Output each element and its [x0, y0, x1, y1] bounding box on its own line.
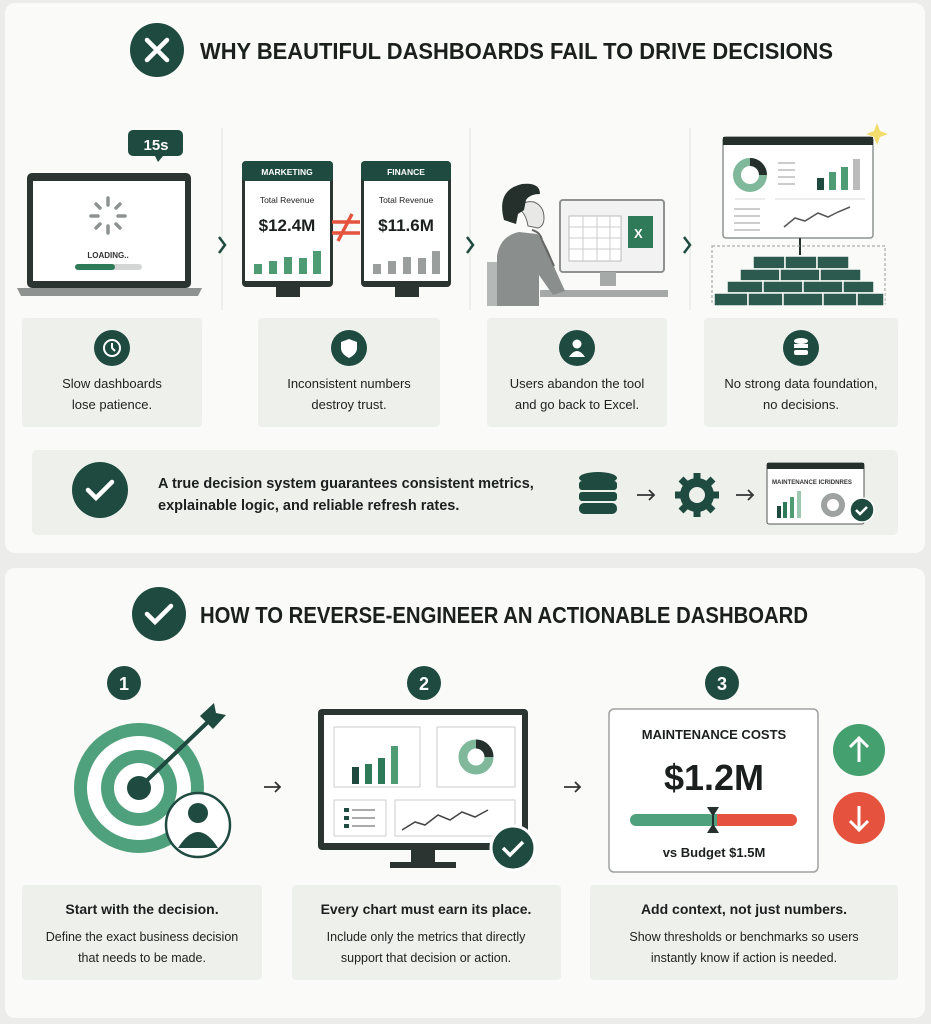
card: slow dashboards: lose patience. [72, 397, 152, 412]
icon: down arrow [833, 792, 885, 844]
panel: why dashboards fail [5, 3, 925, 553]
illustration: conflicting monitors: FINANCE [387, 167, 425, 177]
panel: how to reverse-engineer [5, 568, 925, 1018]
illustration: conflicting monitors: Total Revenue [260, 195, 314, 205]
illustration: KPI card with thresholds [609, 709, 818, 872]
card: every chart earns its place: Every chart must earn its place. [321, 901, 531, 917]
card: inconsistent numbers: destroy trust. [311, 397, 387, 412]
step 3 number: 3 [717, 674, 727, 694]
title 1 [130, 23, 833, 77]
card: every chart earns its place [292, 885, 561, 980]
title 2: HOW TO REVERSE-ENGINEER AN ACTIONABLE DASHBOARD [200, 602, 808, 628]
card: users abandon: and go back to Excel. [515, 397, 639, 412]
card: start with the decision: Define the exact business decision [46, 930, 238, 944]
illustration: conflicting monitors: $11.6M [378, 216, 434, 235]
step 1 number: 1 [119, 674, 129, 694]
icon: gear [675, 473, 719, 517]
card: every chart earns its place: support that decision or action. [341, 951, 511, 965]
card: inconsistent numbers [258, 318, 440, 427]
card: inconsistent numbers: Inconsistent numbers [287, 376, 411, 391]
illustration: KPI card with thresholds: MAINTENANCE COSTS [642, 727, 787, 742]
card: add context [590, 885, 898, 980]
card: users abandon: Users abandon the tool [510, 376, 644, 391]
card: add context: instantly know if action is needed. [651, 951, 837, 965]
illustration: user back to excel: X [634, 226, 643, 241]
title 2 [132, 587, 808, 641]
step 2 number [407, 666, 441, 700]
step 1 number [107, 666, 141, 700]
step 2 number: 2 [419, 674, 429, 694]
illustration: conflicting monitors [242, 161, 451, 297]
arrow [564, 782, 580, 792]
icon: mini dashboard [767, 463, 874, 524]
illustration: conflicting monitors: MARKETING [261, 167, 313, 177]
card: start with the decision [22, 885, 262, 980]
card: start with the decision: that needs to be made. [78, 951, 206, 965]
banner: true decision system [32, 450, 898, 535]
step 3 number [705, 666, 739, 700]
illustration: conflicting monitors: $12.4M [259, 216, 315, 235]
illustration: slow laptop: 15s [143, 137, 169, 154]
illustration: KPI card with thresholds: vs Budget $1.5M [663, 845, 765, 860]
icon: database [579, 472, 617, 514]
icon: mini dashboard: MAINTENANCE ICRIDNRES [772, 480, 852, 486]
title 1: WHY BEAUTIFUL DASHBOARDS FAIL TO DRIVE DECISIONS [200, 38, 833, 64]
icon: up arrow [833, 724, 885, 776]
card: no data foundation: no decisions. [763, 397, 839, 412]
card: users abandon [487, 318, 667, 427]
banner: true decision system: explainable logic, and reliable refresh rates. [158, 498, 459, 514]
illustration: target with person [74, 703, 230, 857]
card: no data foundation: No strong data foundation, [724, 376, 878, 391]
banner: true decision system: A true decision system guarantees consistent metrics, [158, 476, 534, 492]
illustration: user back to excel [487, 184, 668, 306]
illustration: data foundation [712, 123, 888, 306]
card: slow dashboards: Slow dashboards [62, 376, 162, 391]
card: start with the decision: Start with the decision. [65, 901, 219, 917]
illustration: slow laptop: LOADING.. [87, 251, 129, 260]
arrow [467, 237, 473, 253]
illustration: slow laptop [17, 130, 202, 296]
arrow [684, 237, 690, 253]
card: no data foundation [704, 318, 898, 427]
illustration: KPI card with thresholds: $1.2M [664, 757, 764, 798]
card: slow dashboards [22, 318, 202, 427]
arrow [264, 782, 280, 792]
card: add context: Show thresholds or benchmarks so users [629, 930, 859, 944]
illustration: dashboard monitor [318, 709, 535, 870]
card: every chart earns its place: Include only the metrics that directly [327, 930, 526, 944]
card: add context: Add context, not just numbers. [641, 901, 847, 917]
arrow [219, 237, 225, 253]
illustration: conflicting monitors: Total Revenue [379, 195, 433, 205]
